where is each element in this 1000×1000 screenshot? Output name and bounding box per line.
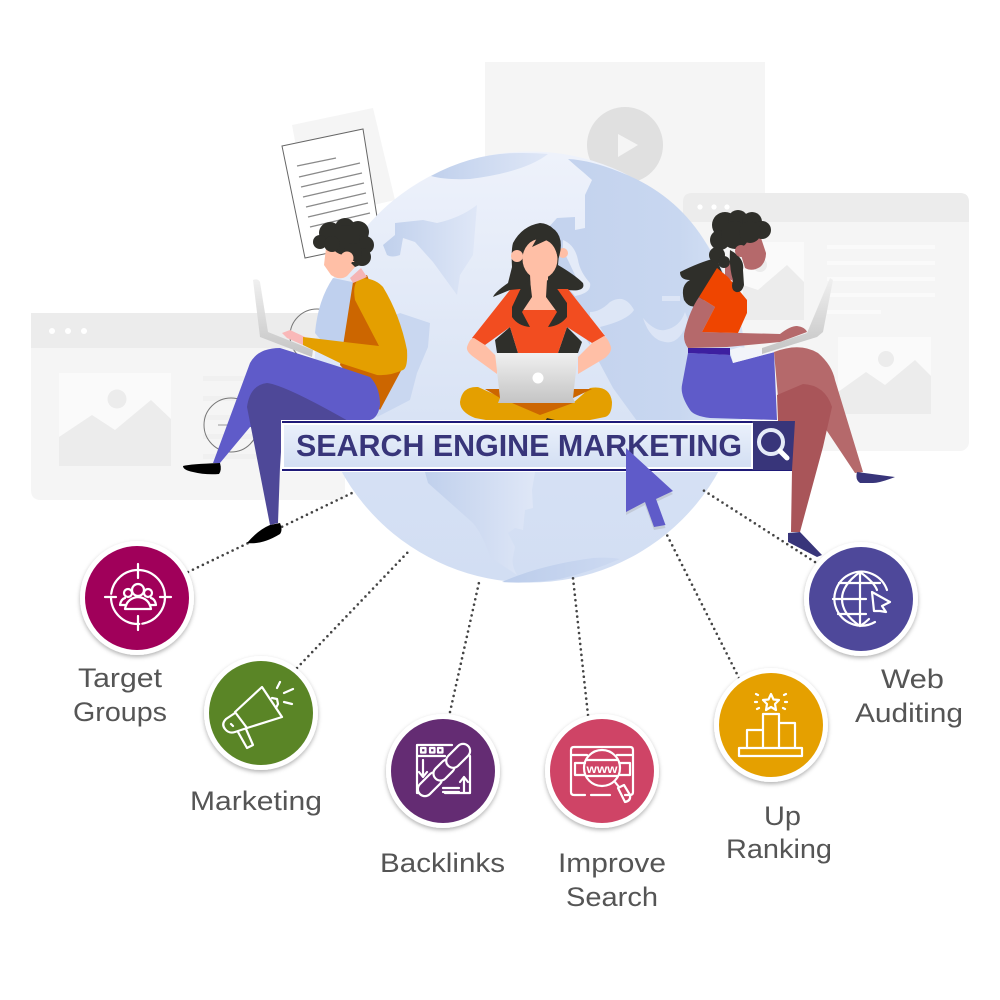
icon: target audience: [105, 564, 171, 630]
globe: [314, 152, 746, 583]
label: Marketing: Marketing: [190, 786, 322, 816]
search bar: [281, 420, 796, 472]
icon: cursor arrow: [626, 448, 673, 530]
item: Marketing: [190, 656, 322, 816]
icon: document sheets: [282, 108, 395, 258]
label: Up Ranking: Up: [764, 801, 801, 831]
item: Up Ranking: [714, 668, 832, 864]
panel: right browser window: [683, 193, 969, 451]
icon: globe with cursor: [833, 572, 890, 626]
item: Web Auditing: [804, 542, 963, 728]
icon text: www: www: [585, 762, 618, 776]
label: Improve Search: Improve: [558, 848, 666, 878]
item: Target Groups: [73, 541, 194, 727]
label: Backlinks: Backlinks: [380, 848, 505, 878]
icon: magnifier: [759, 430, 787, 458]
icon: www magnifier: [571, 747, 633, 802]
label: Web Auditing: Web: [881, 664, 944, 694]
figure: woman sitting at centre: [460, 223, 612, 430]
icon: podium with star: [739, 694, 802, 756]
label: Improve Search: Search: [566, 882, 658, 912]
label: Up Ranking: Ranking: [726, 834, 832, 864]
icon: chain and window: [415, 741, 473, 799]
item: Backlinks: [380, 714, 505, 878]
icon: megaphone: [223, 682, 293, 748]
label: Target Groups: Groups: [73, 697, 167, 727]
figure: woman on right torso: [680, 210, 895, 483]
dotted connectors: [188, 490, 815, 715]
figure: man on laptop: [183, 218, 407, 543]
label: Web Auditing: Auditing: [855, 698, 963, 728]
search bar heading: SEARCH ENGINE MARKETING: [296, 428, 742, 463]
panel: video player window: [485, 62, 765, 262]
panel: left browser window: [31, 309, 345, 500]
item: Improve Search: [545, 714, 666, 912]
label: Target Groups: Target: [78, 663, 163, 693]
figure: right woman front leg: [777, 384, 832, 557]
